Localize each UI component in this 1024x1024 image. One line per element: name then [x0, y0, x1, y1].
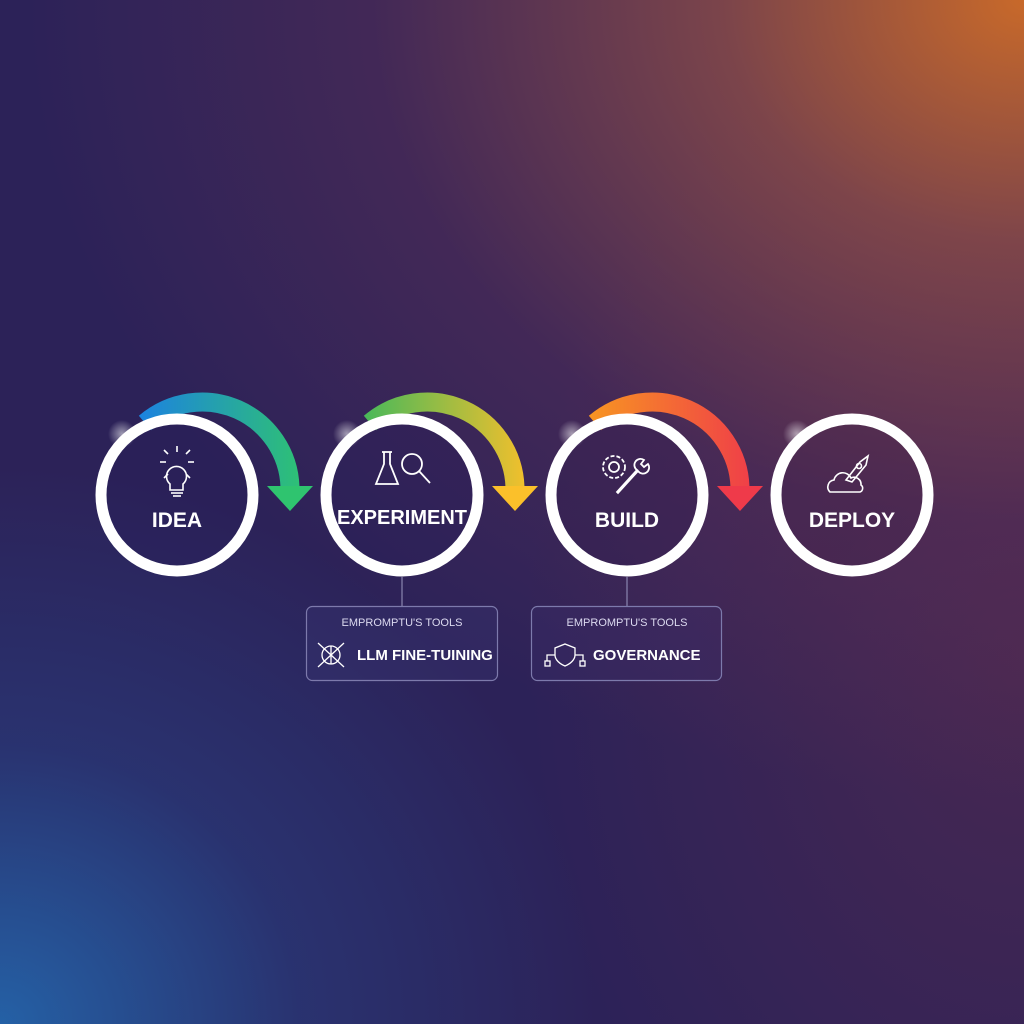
icon: rocket and cloud [828, 456, 868, 492]
tool box: llm fine-tuning: EMPROMPTU'S TOOLS [342, 617, 462, 629]
label: build: BUILD [595, 509, 659, 532]
icon: brain [318, 643, 344, 667]
arrow: experiment to build [370, 402, 538, 511]
icon: light bulb [160, 446, 194, 496]
label: idea: IDEA [152, 509, 202, 532]
step: idea [101, 419, 253, 571]
step: build [551, 419, 703, 571]
step: experiment [326, 419, 478, 571]
arrow: idea to experiment [145, 402, 313, 511]
tool box: llm fine-tuning [306, 606, 498, 680]
tool box: llm fine-tuning: LLM FINE-TUINING [357, 647, 493, 664]
tool box: governance [532, 606, 722, 680]
icon: gear and wrench [603, 456, 649, 493]
icon: shield network [545, 644, 585, 666]
tool box: governance: EMPROMPTU'S TOOLS [567, 617, 687, 629]
icon: flask and magnifier [376, 452, 430, 484]
arrow: build to deploy [595, 402, 763, 511]
label: deploy: DEPLOY [809, 509, 895, 532]
step: deploy [776, 419, 928, 571]
connector lines [402, 577, 627, 606]
label: experiment: EXPERIMENT [337, 507, 467, 529]
tool box: governance: GOVERNANCE [593, 647, 701, 664]
